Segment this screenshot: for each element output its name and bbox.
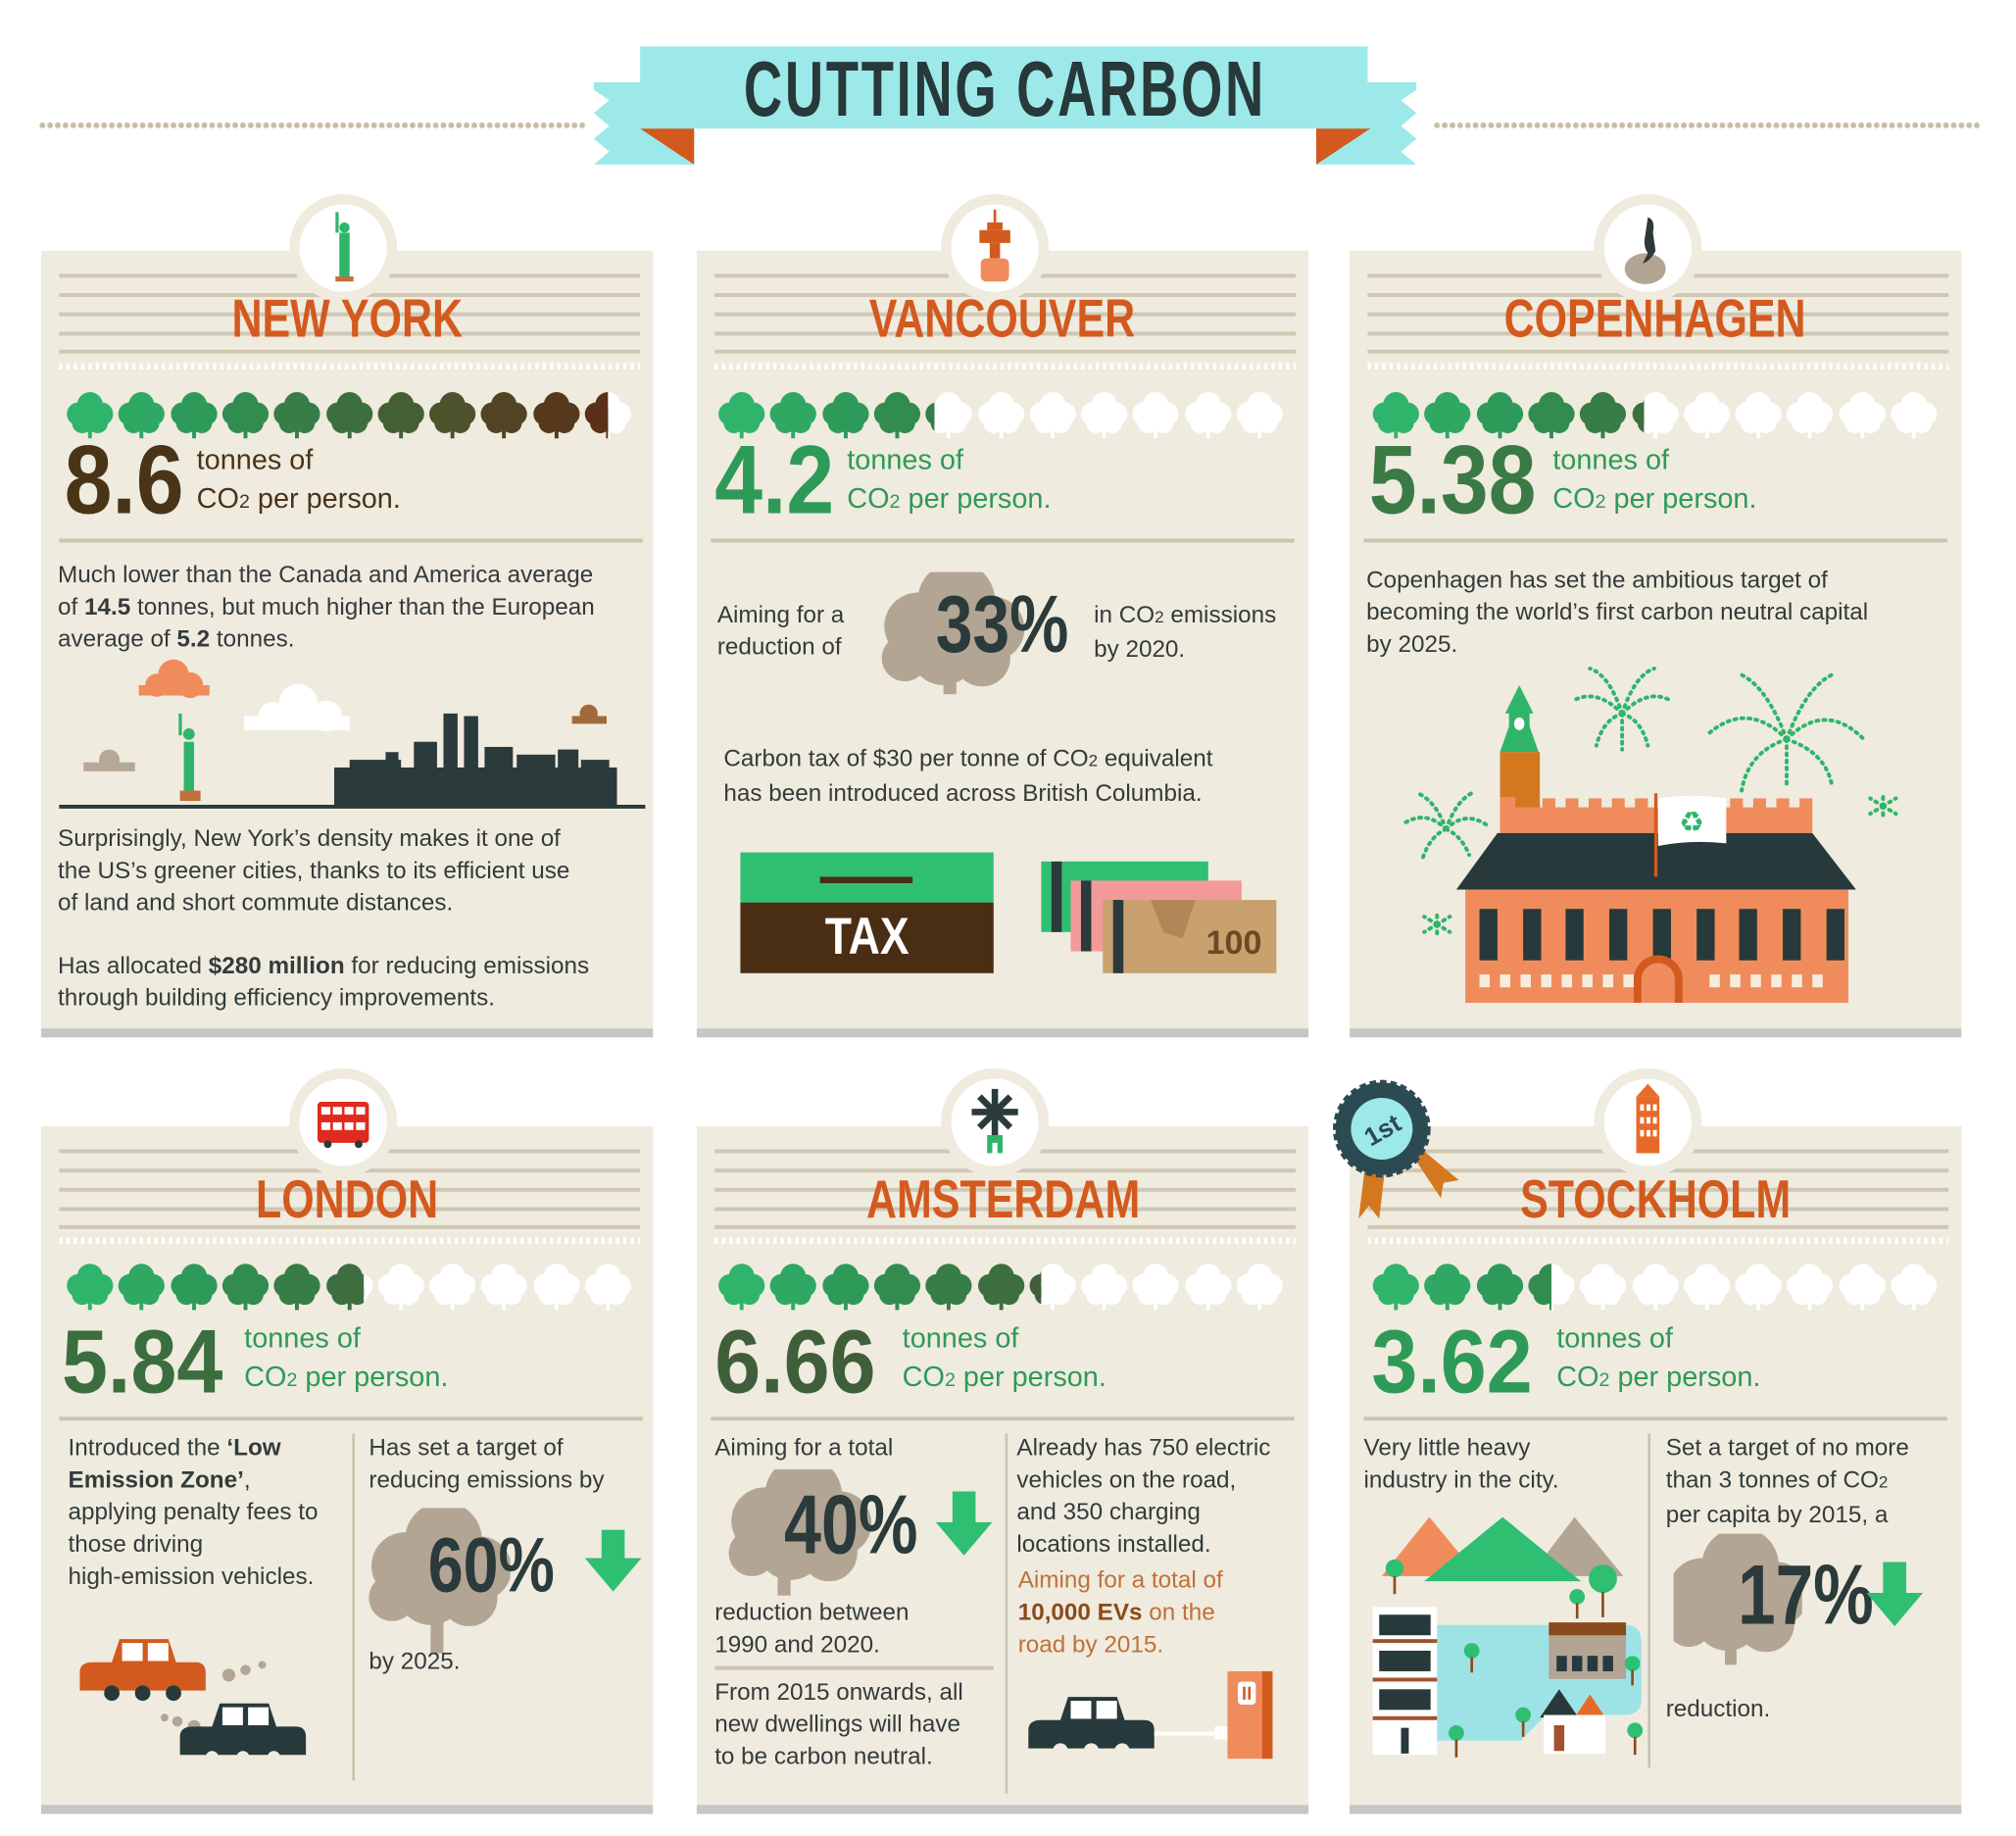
callout: 17% target: than 3 tonnes of CO2 <box>1666 1465 1888 1493</box>
icon: city hall tower <box>1594 1068 1701 1172</box>
callout: 40% reduction: 1990 and 2020. <box>714 1630 880 1658</box>
stat 5.38: 5.38 <box>1369 425 1536 535</box>
panel: London <box>41 1126 653 1805</box>
panel: Amsterdam: CO2 per person. <box>903 1361 1106 1392</box>
text: target <box>1366 566 1868 657</box>
callout: 40% reduction <box>714 1433 992 1658</box>
text: density: the US’s greener cities, thanks to its efficient use <box>58 856 569 883</box>
text: new dwellings: to be carbon neutral. <box>714 1742 933 1769</box>
panel: Stockholm: tonnes of <box>1556 1321 1673 1354</box>
callout: 33% reduction: by 2020. <box>1094 635 1185 662</box>
text: electric vehicles: Already has 750 electric <box>1016 1433 1270 1461</box>
text: low emission zone: Emission Zone’, <box>69 1465 251 1493</box>
panel: Stockholm: CO2 per person. <box>1556 1361 1760 1392</box>
icon: double-decker bus <box>289 1068 397 1172</box>
text: density: Surprisingly, New York’s density makes it one of <box>58 824 561 851</box>
text: comparison: average of 5.2 tonnes. <box>58 624 294 652</box>
badge: 1st rosette <box>1333 1080 1458 1219</box>
text: EV target: Aiming for a total of <box>1018 1565 1223 1593</box>
callout: 40% reduction: Aiming for a total <box>714 1433 893 1461</box>
text: little industry: Very little heavy <box>1364 1433 1530 1461</box>
callout: 60% target <box>369 1433 641 1674</box>
callout: 33% reduction <box>717 572 1276 694</box>
text: new dwellings: From 2015 onwards, all <box>714 1678 963 1705</box>
panel: Vancouver: tonnes of <box>847 443 963 475</box>
dotted rule left <box>38 123 585 128</box>
text: low emission zone: those driving <box>69 1530 203 1557</box>
text: low emission zone: high-emission vehicles. <box>69 1562 314 1589</box>
panel: New York <box>41 251 653 1028</box>
heading: New York: NEW YORK <box>231 288 463 348</box>
text: EV target <box>1017 1565 1223 1658</box>
trees rating 5.84 <box>67 1264 631 1310</box>
text: allocation <box>58 952 589 1011</box>
panel: Vancouver <box>697 251 1308 1028</box>
panel: Stockholm <box>1350 1126 1961 1805</box>
text: low emission zone <box>69 1433 318 1589</box>
panel: New York: tonnes of <box>197 443 313 475</box>
text: little industry <box>1364 1433 1559 1493</box>
text: EV target: road by 2015. <box>1018 1630 1163 1658</box>
callout: 60% target: by 2025. <box>369 1647 460 1674</box>
stat 8.6: 8.6 <box>65 425 184 535</box>
illustration: electric car charging <box>1028 1670 1272 1759</box>
callout: 60% target: 60% <box>428 1522 555 1609</box>
text: allocation: through building efficiency improvements. <box>58 983 495 1011</box>
text: little industry: industry in the city. <box>1364 1465 1559 1493</box>
text: EV target: 10,000 EVs on the <box>1018 1598 1215 1625</box>
callout: 17% target: per capita by 2015, a <box>1666 1501 1888 1527</box>
callout: 40% reduction: 40% <box>784 1477 918 1571</box>
text: target: becoming the world’s first carbon neutral capital <box>1366 598 1868 624</box>
callout: 33% reduction: 33% <box>936 579 1068 670</box>
text: density: of land and short commute distances. <box>58 888 453 916</box>
stat 5.84: 5.84 <box>62 1312 222 1412</box>
callout: 17% target: reduction. <box>1666 1695 1770 1721</box>
icon: harbour tower <box>941 194 1049 297</box>
illustration: Stockholm waterfront <box>1372 1517 1643 1758</box>
panel: New York: CO2 per person. <box>197 482 401 515</box>
panel: London: tonnes of <box>244 1321 361 1354</box>
callout: 17% target <box>1666 1433 1923 1721</box>
heading: Vancouver: VANCOUVER <box>869 288 1136 348</box>
text: new dwellings: new dwellings will have <box>714 1710 960 1737</box>
callout: 17% target: 17% <box>1738 1547 1874 1642</box>
callout: 33% reduction: Aiming for a <box>717 600 844 627</box>
icon: statue of liberty <box>289 194 398 297</box>
illustration: skyline <box>59 659 645 809</box>
panel: Amsterdam: tonnes of <box>903 1321 1018 1354</box>
illustration: tax box: TAX <box>825 909 910 966</box>
text: comparison: Much lower than the Canada and America average <box>58 561 593 587</box>
stat 4.2: 4.2 <box>714 425 834 535</box>
heading: Stockholm: STOCKHOLM <box>1520 1168 1791 1229</box>
text: allocation: Has allocated $280 million for reducing emissions <box>58 952 589 978</box>
badge: 1st rosette: 1st <box>1359 1108 1406 1152</box>
callout: 40% reduction: reduction between <box>714 1598 909 1625</box>
panel: Copenhagen: tonnes of <box>1552 443 1669 475</box>
heading: London: LONDON <box>256 1168 438 1229</box>
trees rating 3.62 <box>1372 1264 1937 1310</box>
panel: Copenhagen <box>1350 251 1961 1028</box>
heading: Amsterdam: AMSTERDAM <box>865 1168 1140 1229</box>
text: electric vehicles <box>1016 1433 1270 1557</box>
illustration: banknotes <box>1041 861 1276 973</box>
callout: 33% reduction: reduction of <box>717 632 842 660</box>
text: electric vehicles: and 350 charging <box>1016 1498 1201 1524</box>
text: target: by 2025. <box>1366 630 1457 657</box>
illustration: banknotes: 100 <box>1206 924 1261 962</box>
panel: Amsterdam <box>697 1126 1308 1805</box>
panel: London: CO2 per person. <box>244 1361 448 1392</box>
illustration: tax box <box>740 853 994 973</box>
text: carbon tax: has been introduced across British Columbia. <box>723 779 1203 806</box>
trees rating 5.38 <box>1372 392 1937 439</box>
heading: Copenhagen: COPENHAGEN <box>1504 288 1806 348</box>
icon: little mermaid <box>1594 194 1701 297</box>
text: target: Copenhagen has set the ambitious target of <box>1366 566 1828 593</box>
icon: windmill <box>941 1068 1049 1172</box>
dotted rule right <box>1433 123 1980 128</box>
panel: Vancouver: CO2 per person. <box>847 482 1051 515</box>
illustration: city hall with fireworks <box>1403 667 1897 1003</box>
text: comparison <box>58 561 595 652</box>
illustration: cars <box>79 1639 306 1755</box>
stat 3.62: 3.62 <box>1371 1312 1533 1412</box>
callout: 60% target: reducing emissions by <box>369 1465 604 1493</box>
illustration: city hall with fireworks: ♻ <box>1679 806 1704 839</box>
text: carbon tax: Carbon tax of $30 per tonne of CO2 equivalent <box>723 744 1212 771</box>
text: new dwellings <box>714 1678 963 1769</box>
callout: 33% reduction: in CO2 emissions <box>1094 600 1276 627</box>
text: electric vehicles: vehicles on the road, <box>1016 1465 1236 1493</box>
trees rating 8.6 <box>67 392 631 439</box>
text: density <box>58 824 569 916</box>
text: low emission zone: Introduced the ‘Low <box>69 1433 281 1461</box>
text: carbon tax <box>723 744 1213 806</box>
title: CUTTING CARBON <box>744 45 1266 132</box>
trees rating 6.66 <box>718 1264 1283 1310</box>
title banner <box>594 45 1417 165</box>
panel: Copenhagen: CO2 per person. <box>1552 482 1756 515</box>
text: comparison: of 14.5 tonnes, but much higher than the European <box>58 593 595 620</box>
trees rating 4.2 <box>718 392 1283 439</box>
text: low emission zone: applying penalty fees to <box>69 1498 318 1524</box>
callout: 60% target: Has set a target of <box>369 1433 564 1461</box>
text: electric vehicles: locations installed. <box>1016 1530 1211 1557</box>
callout: 17% target: Set a target of no more <box>1666 1433 1909 1461</box>
stat 6.66: 6.66 <box>714 1312 876 1412</box>
